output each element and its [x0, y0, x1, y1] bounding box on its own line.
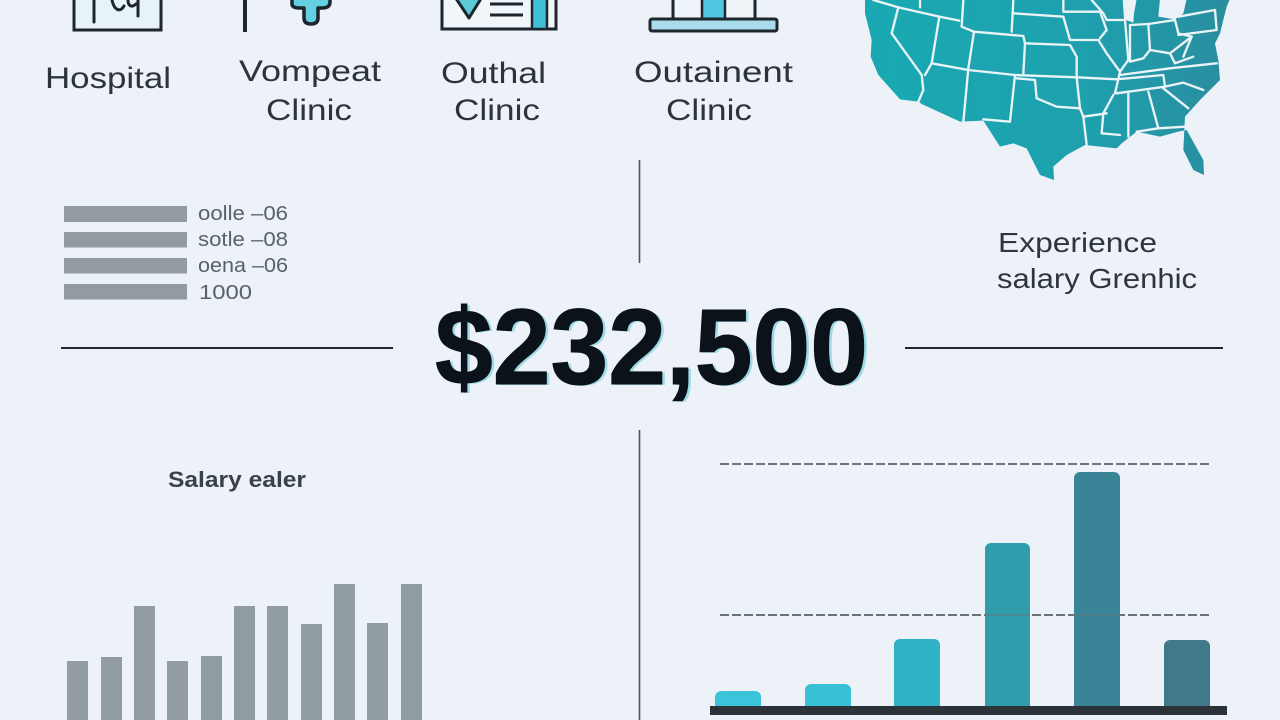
label: outhal clinic: Clinic: [454, 94, 540, 127]
legend: gray bars: [64, 203, 288, 304]
vertical divider: top: [638, 160, 640, 263]
label: outainent clinic: Clinic: [666, 94, 752, 127]
label: outainent clinic: [634, 56, 794, 127]
headline figure: salary: $232,500: [435, 286, 868, 407]
headline figure: salary: $232,500: [438, 287, 871, 408]
bar chart: gray salary bars: [67, 584, 422, 720]
heading: salary ealer: Salary ealer: [168, 467, 306, 492]
vertical divider: bottom: [638, 430, 640, 720]
icon: hospital: [74, 0, 161, 30]
legend: gray bars: oena –06: [198, 255, 288, 277]
rule: left of salary figure: [61, 347, 393, 349]
icon: outhal clinic card: [442, 0, 556, 29]
legend: gray bars: sotle –08: [198, 229, 288, 251]
heading: experience salary graphic: [997, 227, 1197, 294]
heading: experience salary graphic: Experience: [998, 227, 1157, 258]
label: outhal clinic: Outhal: [441, 57, 546, 90]
heading: experience salary graphic: salary Grenhic: [997, 263, 1197, 294]
label: vompeat clinic: Clinic: [266, 94, 352, 127]
label: hospital: Hospital: [45, 62, 171, 95]
icon: outpatient building: [650, 0, 777, 31]
legend: gray bars: 1000: [199, 282, 252, 304]
rule: right of salary figure: [905, 347, 1223, 349]
legend: gray bars: oolle –06: [198, 203, 288, 225]
label: vompeat clinic: [239, 55, 382, 127]
label: outhal clinic: [441, 57, 546, 127]
map: United States: [865, 0, 1230, 180]
label: outainent clinic: Outainent: [634, 56, 794, 89]
label: vompeat clinic: Vompeat: [239, 55, 382, 88]
icon: clinic cross: [245, 0, 330, 32]
bar chart: experience salary bars: [710, 464, 1227, 715]
